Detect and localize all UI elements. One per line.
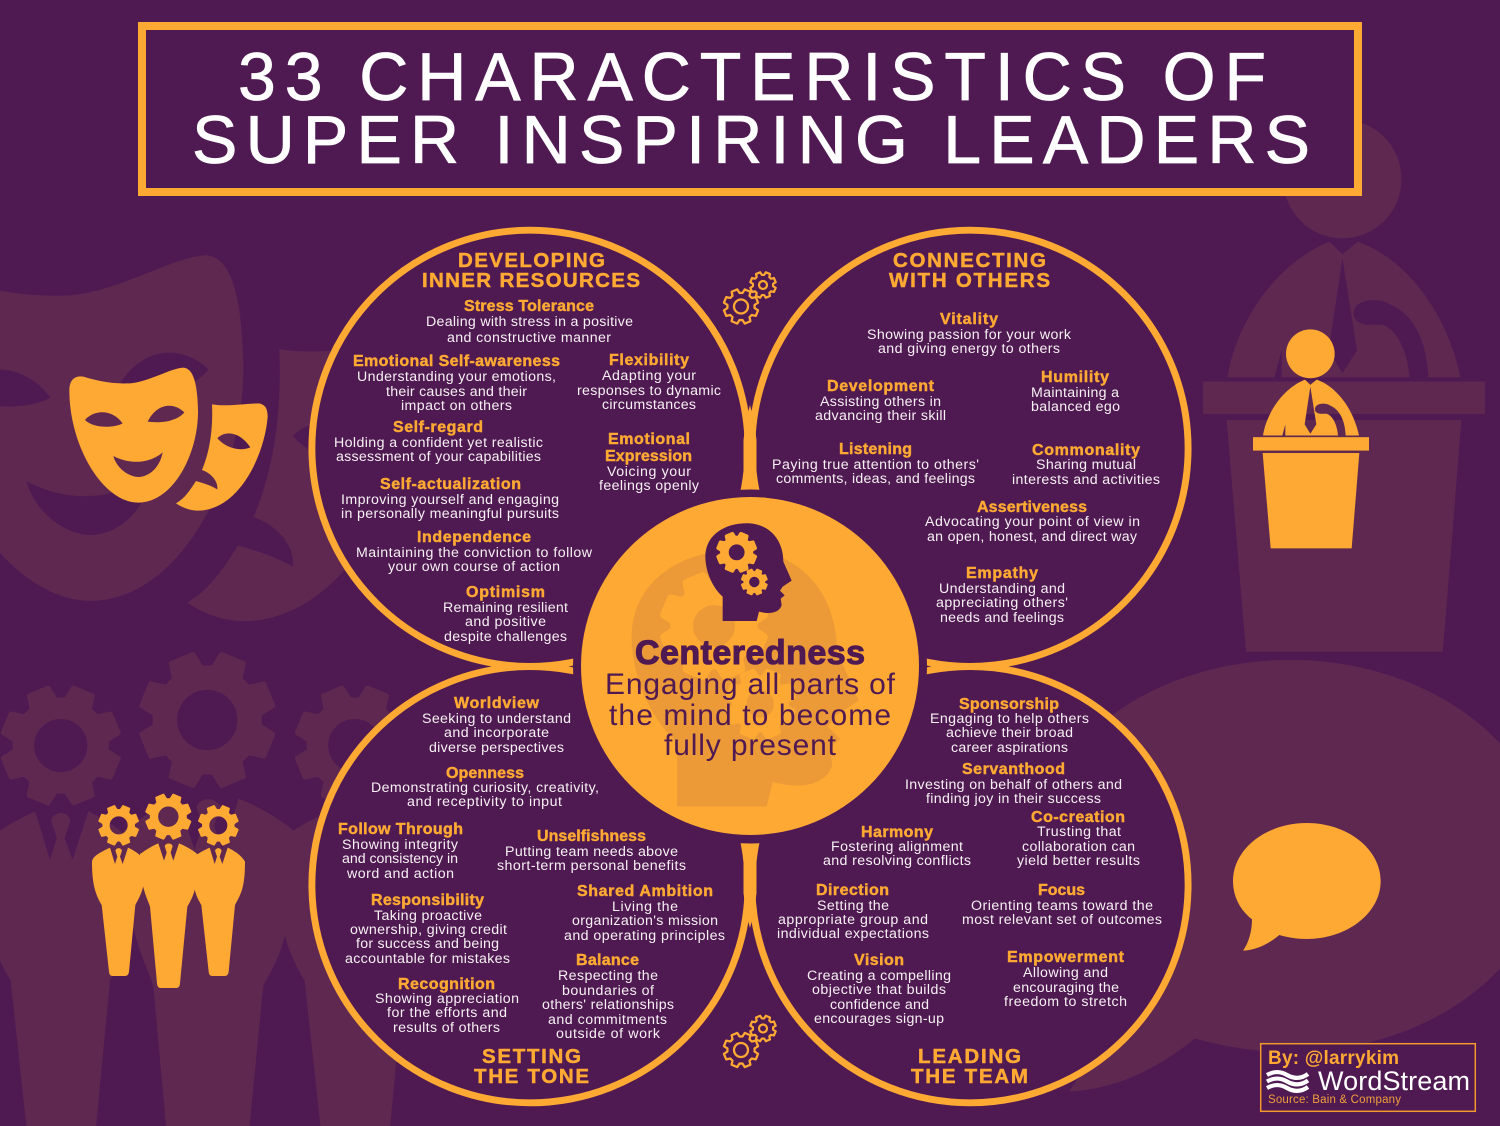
item: independence — [356, 529, 593, 575]
title banner: 33 CHARACTERISTICS OF — [238, 39, 1266, 115]
item: recognition: Showing appreciation — [375, 991, 519, 1007]
item: optimism: despite challenges — [444, 629, 567, 645]
item: openness: Demonstrating curiosity, creativity, — [371, 780, 599, 796]
item: commonality: interests and activities — [1012, 472, 1160, 488]
item: empowerment — [1004, 949, 1127, 1010]
item: humility: Humility — [1041, 369, 1109, 386]
item: shared ambition — [564, 883, 725, 944]
item: humility: Maintaining a — [1031, 385, 1119, 401]
icon: speaker at podium — [1253, 329, 1369, 548]
item: co-creation: Trusting that — [1037, 824, 1121, 840]
item: listening — [772, 441, 979, 487]
item: recognition — [375, 976, 519, 1036]
item: empowerment: freedom to stretch — [1004, 994, 1127, 1010]
item: development: Assisting others in — [820, 394, 941, 410]
item: co-creation: Co-creation — [1031, 809, 1125, 826]
item: vision: confidence and — [830, 997, 929, 1013]
icon: speech bubble — [1233, 823, 1381, 951]
heading: developing inner resources: INNER RESOURCES — [422, 269, 640, 292]
item: follow through: Showing integrity — [342, 837, 459, 853]
item: balance: others' relationships — [542, 997, 674, 1013]
heading: setting the tone — [474, 1045, 589, 1088]
item: sponsorship — [930, 696, 1089, 756]
item: sponsorship: achieve their broad — [946, 725, 1073, 741]
item: empowerment: Empowerment — [1007, 949, 1125, 966]
background ghost: speech bubble — [1034, 660, 1500, 1091]
item: empathy — [936, 565, 1068, 626]
heading: connecting with others: CONNECTING — [893, 249, 1046, 272]
credit box: By: @larrykim — [1268, 1048, 1399, 1069]
item: flexibility: responses to dynamic — [577, 383, 721, 399]
item: unselfishness: Putting team needs above — [505, 844, 678, 860]
item: emotional expression: Emotional — [608, 431, 690, 448]
heading: leading the team: THE TEAM — [911, 1065, 1028, 1088]
item: emotional expression: feelings openly — [599, 478, 700, 494]
item: worldview: and incorporate — [444, 725, 549, 741]
item: vision: objective that builds — [812, 982, 946, 998]
item: direction: Setting the — [817, 898, 889, 914]
item: vitality: and giving energy to others — [878, 341, 1060, 357]
item: direction — [777, 882, 929, 942]
item: sponsorship: career aspirations — [951, 740, 1068, 756]
item: development: advancing their skill — [815, 408, 946, 424]
hub text: the mind to become — [609, 699, 891, 732]
item: direction: individual expectations — [777, 926, 929, 942]
item: harmony — [823, 824, 971, 869]
item: focus — [962, 882, 1162, 928]
item: balance: outside of work — [556, 1026, 661, 1042]
item: focus: Focus — [1038, 882, 1085, 899]
item: openness: Openness — [446, 765, 524, 782]
item: recognition: results of others — [393, 1020, 500, 1036]
credit box — [1261, 1044, 1475, 1111]
item: shared ambition: organization's mission — [572, 913, 718, 929]
item: empathy: appreciating others' — [936, 595, 1068, 611]
item: direction: Direction — [816, 882, 889, 899]
item: self-actualization: Self-actualization — [380, 476, 521, 493]
item: emotional expression: Voicing your — [607, 464, 691, 480]
item: servanthood: Servanthood — [962, 761, 1065, 778]
item: follow through: and consistency in — [342, 851, 458, 867]
item: development — [815, 378, 946, 424]
heading: leading the team — [911, 1045, 1028, 1088]
item: servanthood: Investing on behalf of others and — [905, 777, 1122, 793]
item: shared ambition: and operating principles — [564, 928, 725, 944]
item: harmony: and resolving conflicts — [823, 853, 971, 869]
item: empowerment: encouraging the — [1013, 980, 1119, 996]
item: assertiveness: an open, honest, and direct way — [927, 529, 1138, 545]
item: emotional expression: Expression — [605, 448, 692, 465]
hub text: fully present — [664, 729, 837, 762]
item: self-actualization — [341, 476, 559, 522]
item: self-regard — [334, 419, 543, 465]
panel: developing inner resources — [334, 249, 721, 645]
item: unselfishness — [497, 828, 686, 874]
item: commonality — [1012, 442, 1160, 488]
item: optimism: and positive — [465, 614, 546, 630]
item: flexibility: Adapting your — [602, 368, 696, 384]
item: harmony: Harmony — [861, 824, 933, 841]
item: servanthood: finding joy in their success — [926, 791, 1101, 807]
item: vision: Vision — [854, 952, 904, 969]
item: empathy: needs and feelings — [940, 610, 1064, 626]
panel: leading the team — [777, 696, 1162, 1088]
item: balance: and commitments — [548, 1012, 667, 1028]
item: commonality: Commonality — [1032, 442, 1140, 459]
item: assertiveness — [925, 499, 1140, 545]
item: self-actualization: Improving yourself and engaging — [341, 492, 559, 508]
item: worldview: diverse perspectives — [429, 740, 564, 756]
item: balance: Balance — [576, 952, 639, 969]
four quadrant rings — [312, 230, 1188, 1103]
item: responsibility: Responsibility — [371, 892, 484, 909]
item: humility: balanced ego — [1031, 399, 1120, 415]
item: recognition: Recognition — [398, 976, 495, 993]
item: listening: comments, ideas, and feelings — [776, 471, 975, 487]
heading: developing inner resources — [422, 249, 640, 292]
item: responsibility — [345, 892, 510, 967]
item: humility — [1031, 369, 1120, 415]
item: sponsorship: Engaging to help others — [930, 711, 1089, 727]
item: stress tolerance: Dealing with stress in a positive — [426, 314, 633, 330]
item: optimism: Remaining resilient — [443, 600, 568, 616]
item: emotional self-awareness: Understanding your emotions, — [357, 369, 556, 385]
item: vitality: Vitality — [940, 311, 998, 328]
item: self-regard: Holding a confident yet realistic — [334, 435, 543, 451]
item: emotional self-awareness: their causes and their — [386, 384, 527, 400]
item: servanthood — [905, 761, 1122, 807]
item: emotional self-awareness — [353, 353, 560, 414]
item: recognition: for the efforts and — [387, 1005, 507, 1021]
item: assertiveness: Assertiveness — [977, 499, 1087, 516]
item: worldview — [422, 695, 571, 756]
item: vision: encourages sign-up — [814, 1011, 944, 1027]
item: responsibility: for success and being — [356, 936, 499, 952]
item: empathy: Empathy — [966, 565, 1038, 582]
background ghost: theatre masks — [0, 255, 422, 621]
item: optimism — [443, 584, 568, 645]
item: independence: Maintaining the conviction to follow — [356, 545, 593, 561]
item: flexibility: circumstances — [602, 397, 696, 413]
item: shared ambition: Living the — [612, 899, 678, 915]
item: development: Development — [827, 378, 935, 395]
item: openness — [371, 765, 599, 810]
panel: setting the tone — [338, 695, 725, 1088]
hub text: Engaging all parts of — [605, 668, 896, 701]
item: balance: Respecting the — [558, 968, 658, 984]
item: independence: Independence — [417, 529, 531, 546]
item: worldview: Seeking to understand — [422, 711, 571, 727]
item: listening: Paying true attention to others' — [772, 457, 979, 473]
ghost head in hub — [632, 550, 859, 807]
item: direction: appropriate group and — [778, 912, 928, 928]
background ghost: speaker at podium — [1203, 120, 1485, 652]
title banner: SUPER INSPIRING LEADERS — [192, 102, 1310, 178]
item: independence: your own course of action — [388, 559, 560, 575]
heading: setting the tone: THE TONE — [474, 1065, 589, 1088]
item: vitality: Showing passion for your work — [867, 327, 1072, 343]
item: openness: and receptivity to input — [407, 794, 562, 810]
hub text — [605, 634, 896, 762]
credit box: Source: Bain & Company — [1268, 1094, 1401, 1106]
item: unselfishness: short-term personal benefits — [497, 858, 686, 874]
item: commonality: Sharing mutual — [1036, 457, 1136, 473]
panel: connecting with others — [772, 249, 1160, 626]
background ghost: gear-headed people — [0, 655, 433, 1126]
item: harmony: Fostering alignment — [831, 839, 963, 855]
panel: centeredness hub — [581, 497, 919, 835]
heading: connecting with others: WITH OTHERS — [889, 269, 1050, 292]
item: co-creation: collaboration can — [1022, 839, 1135, 855]
item: co-creation — [1017, 809, 1140, 869]
heading: connecting with others — [889, 249, 1050, 292]
title banner — [142, 26, 1358, 192]
heading: developing inner resources: DEVELOPING — [458, 249, 605, 272]
item: self-regard: assessment of your capabilities — [336, 449, 541, 465]
hub text: Centeredness — [635, 634, 865, 672]
item: vision — [807, 952, 951, 1027]
item: stress tolerance: Stress Tolerance — [464, 298, 594, 315]
item: balance: boundaries of — [562, 983, 654, 999]
item: flexibility: Flexibility — [609, 352, 689, 369]
item: vitality — [867, 311, 1072, 357]
item: follow through: word and action — [346, 866, 454, 882]
item: balance — [542, 952, 674, 1042]
icon: head with gears — [705, 523, 792, 621]
item: focus: most relevant set of outcomes — [962, 912, 1162, 928]
icon: outline gears bottom — [724, 1016, 776, 1067]
item: emotional self-awareness: Emotional Self-awareness — [353, 353, 560, 370]
item: follow through — [338, 821, 463, 882]
item: emotional self-awareness: impact on others — [401, 398, 512, 414]
item: stress tolerance — [426, 298, 633, 346]
item: focus: Orienting teams toward the — [971, 898, 1153, 914]
item: unselfishness: Unselfishness — [537, 828, 646, 845]
icon: theatre masks — [69, 368, 268, 511]
item: vision: Creating a compelling — [807, 968, 951, 984]
item: flexibility — [577, 352, 721, 413]
item: sponsorship: Sponsorship — [959, 696, 1059, 713]
item: self-regard: Self-regard — [393, 419, 483, 436]
icon: outline gears top — [724, 272, 776, 324]
heading: leading the team: LEADING — [918, 1045, 1021, 1068]
item: responsibility: Taking proactive — [374, 908, 482, 924]
item: worldview: Worldview — [454, 695, 540, 712]
icon: gear-headed people — [92, 795, 245, 988]
item: follow through: Follow Through — [338, 821, 463, 838]
item: empathy: Understanding and — [939, 581, 1065, 597]
item: responsibility: ownership, giving credit — [350, 922, 507, 938]
item: empowerment: Allowing and — [1023, 965, 1108, 981]
item: listening: Listening — [839, 441, 912, 458]
item: co-creation: yield better results — [1017, 853, 1140, 869]
item: emotional expression — [599, 431, 700, 494]
icon: wordstream waves — [1267, 1072, 1308, 1091]
item: stress tolerance: and constructive manner — [447, 330, 611, 346]
credit box: WordStream — [1318, 1066, 1470, 1096]
item: responsibility: accountable for mistakes — [345, 951, 510, 967]
item: assertiveness: Advocating your point of view in — [925, 514, 1140, 530]
heading: setting the tone: SETTING — [482, 1045, 581, 1068]
item: shared ambition: Shared Ambition — [577, 883, 713, 900]
item: self-actualization: in personally meaningful pursuits — [341, 506, 559, 522]
item: optimism: Optimism — [466, 584, 545, 601]
